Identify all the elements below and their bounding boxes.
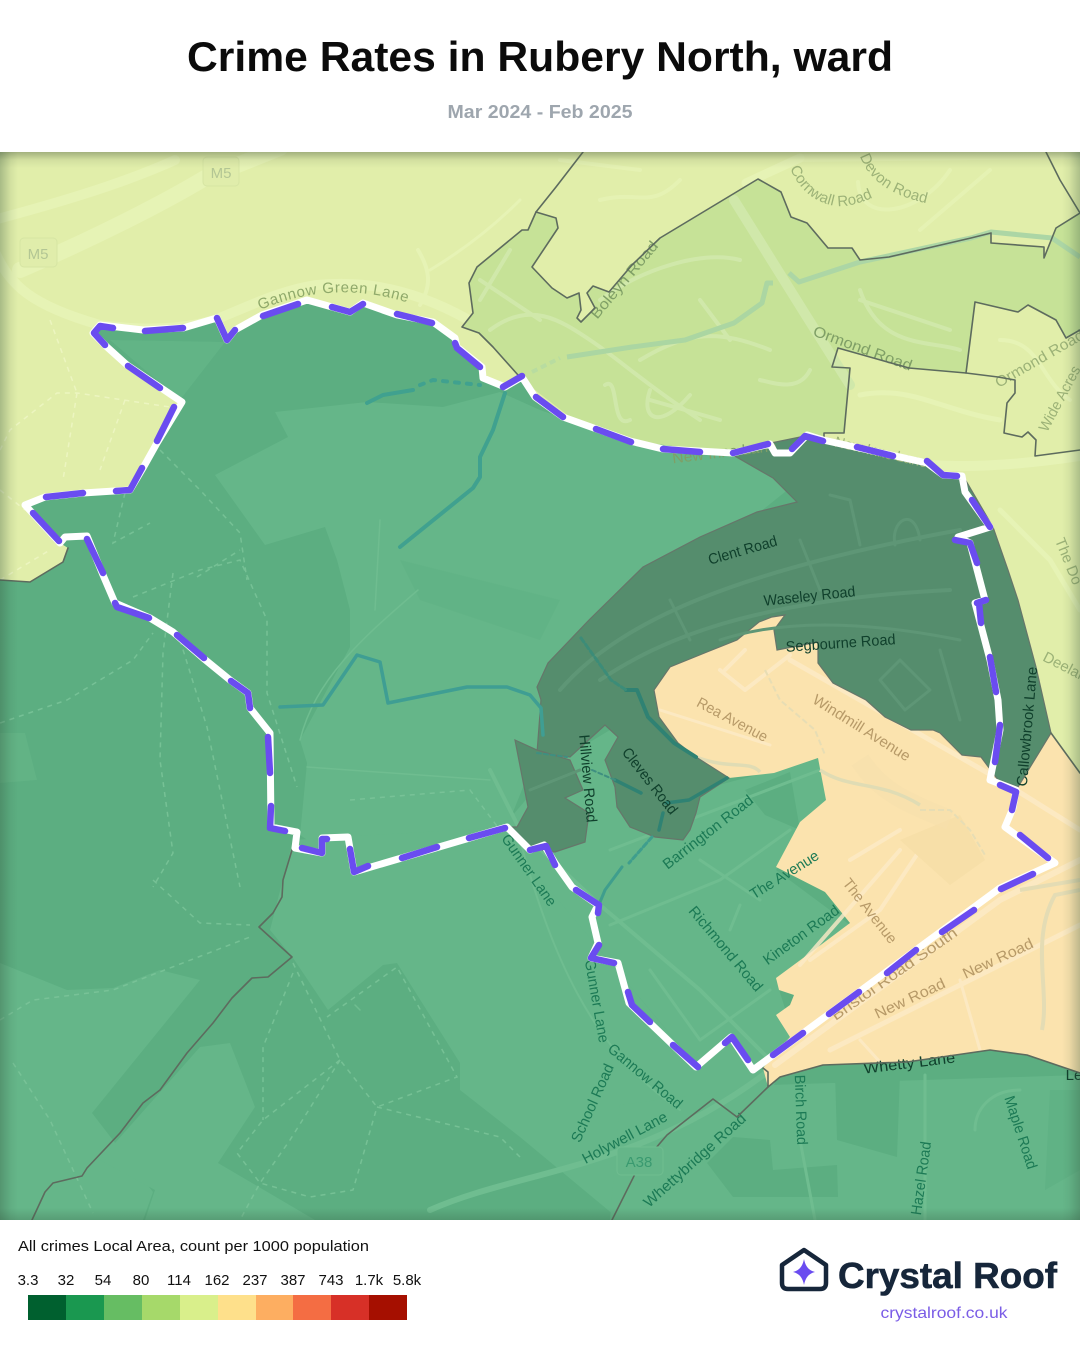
road labels: Holywell Lane <box>579 1108 670 1168</box>
map base: low crime yellow-green <box>0 152 1080 772</box>
road labels: Hazel Road <box>908 1141 935 1216</box>
road labels: New Road <box>872 975 948 1023</box>
road labels: Whettybridge Road <box>640 1110 750 1211</box>
logo: Crystal Roof <box>782 1250 1058 1322</box>
map panel <box>0 152 1080 1220</box>
road shield: A38: A38 <box>626 1154 652 1171</box>
website url: crystalroof.co.uk <box>880 1305 1009 1322</box>
road labels: Windmill Avenue <box>809 691 913 765</box>
road labels: The Avenue <box>839 875 900 947</box>
road labels: Cornwall Road <box>792 166 872 206</box>
lighter land-use patches within medium zone <box>0 340 1080 1220</box>
road labels: Clent Road <box>706 533 779 569</box>
map edge vignette <box>0 152 1080 1220</box>
dark zone estate roads <box>530 495 960 790</box>
road labels: Birch Road <box>791 1075 810 1145</box>
legend value labels: 3.3 <box>18 1272 38 1289</box>
minor roads in medium zone <box>300 520 1020 1220</box>
road shield: M5 lower: M5 <box>28 246 48 263</box>
road labels: Segbourne Road <box>785 631 896 656</box>
legend value labels: 32 <box>58 1272 74 1289</box>
road labels: Whetty Lane <box>863 1049 956 1078</box>
road labels: Ormond Road <box>992 327 1080 391</box>
legend value labels: 162 <box>204 1272 230 1289</box>
road labels: Cleves Road <box>618 744 681 818</box>
zone: dark green small lobe <box>506 740 589 852</box>
legend value labels: 5.8k <box>393 1272 422 1289</box>
streams <box>280 380 727 907</box>
logo wordmark: Crystal Roof <box>838 1255 1058 1296</box>
legend value labels: 237 <box>242 1272 268 1289</box>
road labels: Gannow Road <box>604 1040 686 1113</box>
road labels: Hillview Road <box>575 734 600 823</box>
road labels: Callowbrook Lane <box>1014 666 1041 787</box>
road shield: M5 upper <box>203 157 239 186</box>
darker woodland patches in south-east <box>400 560 1080 1197</box>
road labels: Gannow Green Lane <box>258 282 408 308</box>
title: Crime Rates in Rubery North, ward <box>187 33 893 80</box>
legend value labels: 387 <box>280 1272 306 1289</box>
subtitle: date range: Mar 2024 - Feb 2025 <box>448 102 632 122</box>
road labels: Bristol Road South <box>828 924 961 1024</box>
road labels: Ormond Road <box>811 323 914 375</box>
peach zone roads and stream <box>660 650 1080 1065</box>
road shield: M5 upper: M5 <box>211 165 231 182</box>
road labels: School Road <box>568 1061 618 1145</box>
road labels: Maple Road <box>1000 1094 1040 1171</box>
ward and area outlines <box>0 152 1080 1220</box>
icon: house with star <box>782 1250 826 1289</box>
road labels: Devon Road <box>860 153 928 203</box>
road labels: Kineton Road <box>760 902 843 969</box>
road labels: Barrington Road <box>660 792 757 873</box>
legend value labels: 743 <box>318 1272 344 1289</box>
legend value labels: 1.7k <box>355 1272 384 1289</box>
legend colour scale <box>28 1295 407 1320</box>
road labels: New Road <box>960 935 1036 983</box>
road labels: New Inns Lane <box>833 434 929 472</box>
road shield: A38 <box>617 1147 663 1175</box>
road labels: Waseley Road <box>763 583 856 610</box>
motorway and main road bands <box>0 148 1080 610</box>
ward boundary: white line <box>25 300 1055 1070</box>
road shield: M5 lower <box>20 238 57 267</box>
road labels: Rea Avenue <box>694 694 771 746</box>
legend <box>18 1238 422 1320</box>
ward boundary: purple dashes <box>33 304 1048 1067</box>
road labels: The Avenue <box>747 847 822 903</box>
road labels: Boleyn Road <box>587 238 662 322</box>
zone: dark green main area <box>537 436 1051 840</box>
road labels <box>216 153 1080 1214</box>
legend value labels: 54 <box>95 1272 111 1289</box>
road labels: Richmond Road <box>685 903 766 995</box>
legend value labels: 114 <box>167 1272 191 1289</box>
zone: lighter green north estate <box>462 179 1080 460</box>
dashed footpaths in medium zone <box>0 450 520 1220</box>
road labels: New Inns Lane <box>671 438 778 467</box>
faint footpaths in yellow area <box>0 320 170 580</box>
road labels: Gunner Lane <box>498 831 560 910</box>
legend value labels <box>18 1272 422 1289</box>
zone: peach area <box>654 615 1080 1087</box>
road labels: Gunner Lane <box>581 958 612 1044</box>
legend title: All crimes Local Area, count per 1000 population <box>18 1238 369 1255</box>
legend value labels: 80 <box>133 1272 149 1289</box>
estate roads and stream in north zone <box>480 200 960 421</box>
zone: medium green ward and south (shaded base) <box>0 300 1080 1220</box>
